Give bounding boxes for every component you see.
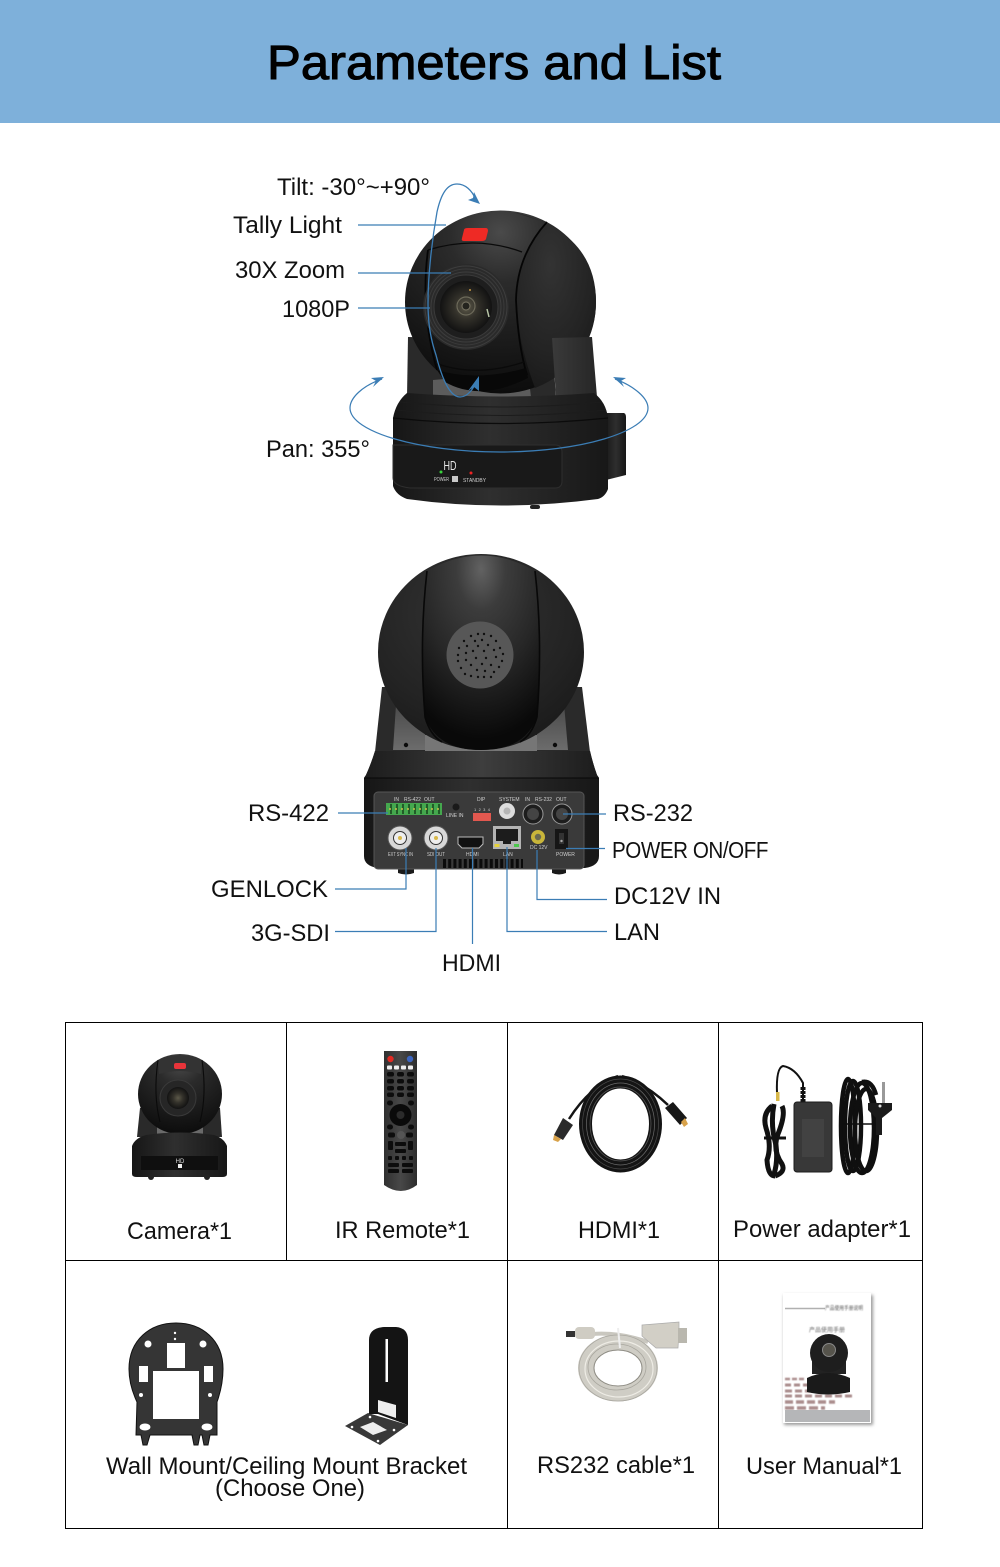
title: Parameters and List — [267, 37, 721, 90]
item: HDMI cable: HDMI*1 — [578, 1217, 660, 1244]
item: HDMI cable — [553, 1076, 688, 1244]
DIP switch: 1 2 3 4 — [474, 807, 491, 812]
adapter brick — [794, 1102, 832, 1172]
camera base — [393, 393, 608, 506]
power switch — [555, 829, 575, 858]
item: IR remote — [335, 1051, 470, 1244]
label: GENLOCK: GENLOCK — [211, 876, 328, 903]
item: camera: Camera*1 — [127, 1218, 232, 1245]
label: Tilt: Tilt: -30°~+90° — [277, 174, 430, 201]
label: HDMI — [442, 848, 501, 977]
DC 12V port: DC 12V — [530, 845, 548, 851]
cable coil — [569, 1076, 668, 1169]
camera rear yoke and wedge — [407, 337, 556, 397]
tally light — [462, 228, 488, 241]
power switch: POWER — [556, 852, 575, 858]
manual cover: 产品使用手册说明 — [825, 1304, 863, 1312]
label: Pan: Pan: 355° — [266, 436, 370, 463]
camera thumbnail — [132, 1054, 227, 1180]
BNC ports: SDI OUT — [427, 852, 445, 858]
item: power adapter — [733, 1066, 911, 1243]
RS-232 ports — [523, 797, 572, 824]
label: 3G-SDI: 3G-SDI — [251, 920, 330, 947]
item: RS232 cable: RS232 cable*1 — [537, 1452, 695, 1479]
label: 1080P: 1080P — [282, 296, 350, 323]
RS-422 terminal: IN — [394, 797, 399, 803]
tilt arrow — [428, 184, 480, 397]
BNC ports: EXT SYNC IN — [388, 852, 413, 858]
camera right yoke arm — [552, 337, 597, 397]
camera head sphere — [405, 210, 596, 394]
label: RS-422 — [248, 800, 388, 827]
line in: LINE IN — [446, 813, 464, 819]
DIP switch: DIP — [477, 797, 486, 803]
label: RS-422: RS-422 — [248, 800, 329, 827]
rear view camera — [364, 554, 599, 874]
RS-422 terminal: RS-422 — [404, 797, 421, 803]
label: GENLOCK — [211, 848, 406, 903]
pan arrow — [350, 377, 648, 452]
label: DC12V IN — [537, 850, 721, 910]
item: IR remote: IR Remote*1 — [335, 1217, 470, 1244]
wall mount L bracket — [345, 1327, 408, 1445]
header banner — [0, 0, 1000, 123]
label: LAN — [507, 847, 660, 946]
label: 3G-SDI — [251, 848, 436, 947]
RS-232 ports: IN — [525, 797, 530, 803]
label: HDMI: HDMI — [442, 950, 501, 977]
label: POWER ON/OFF: POWER ON/OFF — [612, 837, 768, 863]
ceiling mount plate — [129, 1323, 223, 1445]
manual cover: 产品使用手册 — [809, 1326, 845, 1334]
item: mount brackets: Wall Mount/Ceiling Mount Bracket — [106, 1453, 467, 1480]
EU plug — [868, 1082, 892, 1135]
system dial: SYSTEM — [499, 797, 520, 803]
front panel markings: HD — [444, 458, 456, 473]
remote body — [384, 1051, 417, 1191]
item: RS232 cable — [537, 1322, 695, 1479]
manual cover — [783, 1293, 873, 1425]
rear yoke — [375, 687, 590, 752]
item: power adapter: Power adapter*1 — [733, 1216, 911, 1243]
DC 12V port — [530, 830, 548, 851]
item: camera — [127, 1054, 232, 1245]
BNC ports — [388, 826, 448, 858]
LAN port: LAN — [503, 852, 513, 858]
HDMI connectors — [553, 1102, 688, 1142]
power cord coil — [841, 1079, 880, 1173]
rear base — [364, 751, 599, 868]
rear connector panel — [374, 792, 584, 869]
front view camera — [393, 210, 626, 509]
camera thumbnail: HD — [176, 1159, 185, 1165]
RS-422 terminal: OUT — [424, 797, 435, 803]
line in — [446, 804, 464, 819]
label: RS-232 — [563, 800, 693, 827]
label: DC12V IN: DC12V IN — [614, 883, 721, 910]
label: 30X Zoom: 30X Zoom — [235, 257, 345, 284]
HDMI port: HDMI — [466, 852, 479, 858]
accessories table — [65, 1022, 922, 1528]
front panel markings: STANDBY — [463, 478, 487, 484]
cable coil — [579, 1328, 657, 1401]
adapter cord — [764, 1066, 803, 1176]
LAN port — [493, 826, 521, 858]
serial connectors — [566, 1322, 687, 1348]
item: user manual: User Manual*1 — [746, 1453, 902, 1480]
system dial — [499, 797, 520, 819]
item: mount brackets: (Choose One) — [215, 1475, 365, 1502]
rear head sphere — [378, 554, 584, 750]
RS-232 ports: RS-232 — [535, 797, 552, 803]
DIP switch — [473, 797, 491, 821]
front panel markings — [434, 458, 487, 484]
label: RS-232: RS-232 — [613, 800, 693, 827]
lens — [423, 264, 509, 350]
speaker grille — [446, 622, 514, 688]
item: mount brackets — [106, 1323, 467, 1502]
RS-232 ports: OUT — [556, 797, 567, 803]
RS-422 terminal — [386, 797, 442, 815]
label: Tally Light: Tally Light — [233, 212, 342, 239]
label: LAN: LAN — [614, 919, 660, 946]
front panel markings: POWER — [434, 477, 449, 483]
vent slots — [443, 859, 523, 868]
camera side box — [606, 413, 626, 480]
HDMI port — [458, 837, 483, 858]
item: user manual — [746, 1293, 902, 1480]
